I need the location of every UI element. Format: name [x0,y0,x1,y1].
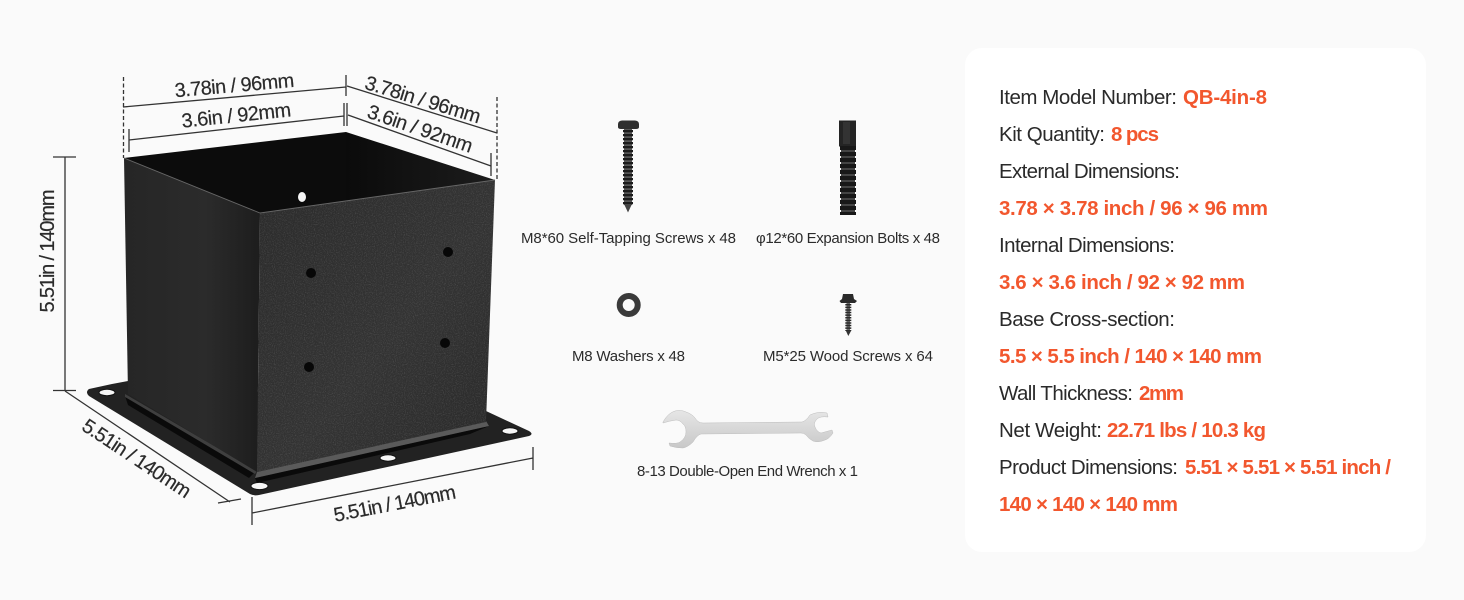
base depth [65,391,241,503]
plate fold highlights [125,394,489,478]
spec: item model number: Item Model Number: [999,86,1177,109]
label: self-tapping screws: M8*60 Self-Tapping Screws x 48 [521,230,736,247]
base depth: 5.51in / 140mm [78,415,195,503]
spec: net weight: Net Weight: [999,419,1102,442]
base width: 5.51in / 140mm [332,481,458,527]
spec: product dimensions [999,456,1391,479]
front face screw holes [304,247,453,372]
spec: wall thickness: 2mm [1139,382,1184,405]
spec: kit quantity: Kit Quantity: [999,123,1105,146]
plate mounting holes [99,389,518,490]
spec: internal dimensions heading: Internal Dimensions: [999,234,1175,257]
spec: product dimensions: Product Dimensions: [999,456,1178,479]
spec: product dimensions: 5.51 × 5.51 × 5.51 inch / [1185,456,1391,479]
inner width, left side: 3.6in / 92mm [181,99,292,133]
outer width, left side [123,70,346,158]
rim highlight [124,158,495,213]
label: expansion bolts: φ12*60 Expansion Bolts x 48 [756,230,940,247]
outer width, right side: 3.78in / 96mm [362,72,483,128]
box left face [124,158,260,472]
height [37,157,76,391]
spec: external dimensions value: 3.78 × 3.78 inch / 96 × 96 mm [999,197,1268,220]
plate fold shadows [125,396,489,483]
spec: base cross-section value: 5.5 × 5.5 inch / 140 × 140 mm [999,345,1262,368]
hardware: washer [620,296,638,314]
spec: item model number: QB-4in-8 [1183,86,1267,109]
dimension lines and labels [37,70,533,527]
hardware: double open-end wrench [663,410,833,448]
label: wood screws: M5*25 Wood Screws x 64 [763,348,933,365]
hardware: wood screw [840,294,857,336]
spec: kit quantity [999,123,1159,146]
hardware: self-tapping screw [618,120,639,212]
spec: net weight: 22.71 lbs / 10.3 kg [1107,419,1266,442]
label: wrench: 8-13 Double-Open End Wrench x 1 [637,463,858,480]
spec: internal dimensions value: 3.6 × 3.6 inch / 92 × 92 mm [999,271,1245,294]
spec: kit quantity: 8 pcs [1111,123,1159,146]
base plate [87,381,532,495]
outer width, left side: 3.78in / 96mm [174,70,295,102]
base width [252,447,533,527]
height: 5.51in / 140mm [37,190,59,312]
spec: net weight [999,419,1266,442]
spec: product dimensions value, second line: 140 × 140 × 140 mm [999,493,1178,516]
product illustration: metal post base [87,132,532,495]
box interior [124,132,495,213]
hardware: expansion bolt [839,120,856,215]
outer width, right side [347,72,497,181]
label: washers: M8 Washers x 48 [572,348,685,365]
spec: wall thickness: Wall Thickness: [999,382,1133,405]
panel: specifications [965,48,1426,552]
front face texture [257,180,495,472]
inner width, left side [129,99,344,152]
inner width, right side: 3.6in / 92mm [364,101,476,158]
box front face [257,180,495,472]
spec: item model number [999,86,1267,109]
inner width, right side [347,101,491,176]
spec: external dimensions heading: External Dimensions: [999,160,1180,183]
spec: base cross-section heading: Base Cross-section: [999,308,1175,331]
